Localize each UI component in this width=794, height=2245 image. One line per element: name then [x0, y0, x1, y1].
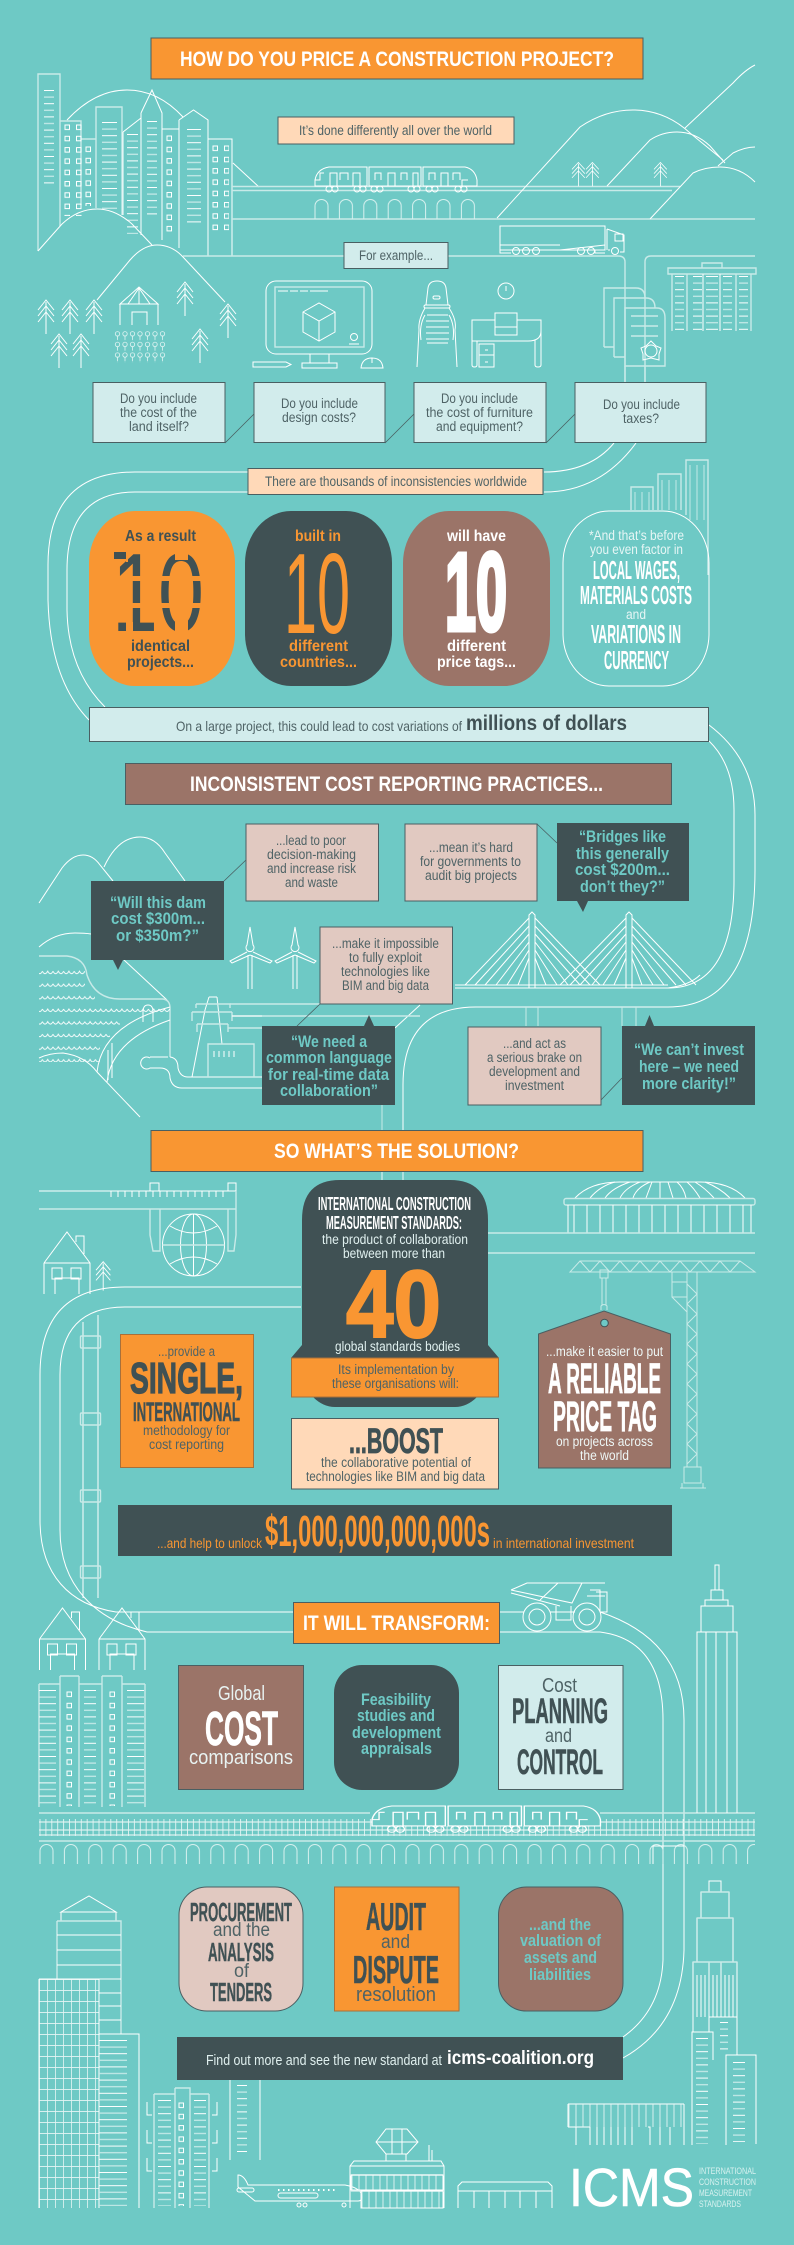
illustration: cable stayed bridge	[455, 912, 700, 1026]
callout: dam cost: “Will this dam	[110, 894, 206, 912]
effect: technologies: technologies like	[341, 964, 430, 979]
panel: audit and dispute: AUDIT	[366, 1896, 426, 1939]
callout: cannot invest	[622, 1015, 755, 1105]
callout: bridge cost: cost $200m...	[575, 861, 670, 879]
effect: poor decision making	[246, 824, 378, 901]
callout: bridge cost: this generally	[576, 845, 670, 863]
panel: cost planning and control: CONTROL	[517, 1743, 603, 1782]
illustration: right tower block	[668, 263, 756, 331]
millions of dollars bar: millions of dollars	[466, 712, 627, 735]
panel: global cost comparisons: comparisons	[189, 1747, 293, 1769]
question: land: land itself?	[129, 419, 189, 434]
panel: ICMS standards: these organisations will:	[332, 1376, 459, 1391]
question: design: design costs?	[282, 410, 356, 425]
panel: cost planning and control: Cost	[542, 1675, 577, 1697]
illustration: house and tree	[44, 1232, 110, 1294]
question: furniture	[414, 382, 546, 442]
panel: identical projects	[89, 511, 235, 686]
panel: reliable price tag: PRICE TAG	[553, 1393, 657, 1441]
illustration: land, trees and farm	[38, 282, 236, 368]
effect: poor decision making: and waste	[285, 875, 338, 890]
effect: poor decision making: ...lead to poor	[276, 833, 346, 848]
panel: ICMS standards: 40	[346, 1251, 441, 1358]
title	[151, 38, 643, 79]
panel: extra factors note: and	[626, 607, 646, 622]
effect: hard for governments: ...mean it’s hard	[429, 840, 513, 855]
panel: cost planning and control: PLANNING	[512, 1692, 608, 1731]
callout: dam cost	[91, 881, 224, 970]
question: design: Do you include	[281, 396, 358, 411]
panel: different countries	[245, 511, 392, 686]
panel: audit and dispute: and	[381, 1932, 410, 1953]
illustration: pylon and substation	[192, 997, 420, 1077]
panel: procurement and tenders: ANALYSIS	[208, 1937, 274, 1967]
panel: global cost comparisons: COST	[205, 1703, 278, 1756]
logo: ICMS: CONSTRUCTION	[699, 2177, 756, 2188]
illustration: right skyscrapers	[568, 1881, 756, 2145]
illustration: empire state style tower	[697, 1565, 737, 1813]
effect: serious brake: a serious brake on	[487, 1050, 582, 1065]
panel: valuation of assets: assets and	[524, 1949, 597, 1967]
panel: procurement and tenders: TENDERS	[210, 1977, 272, 2007]
panel: identical projects: projects...	[127, 654, 194, 671]
heading: inconsistent cost reporting: INCONSISTENT COST REPORTING PRACTICES...	[190, 773, 603, 796]
for example box: For example...	[359, 248, 433, 263]
callout: dam cost: cost $300m...	[111, 910, 205, 928]
question: taxes	[575, 382, 706, 442]
panel: valuation of assets: ...and the	[529, 1916, 591, 1934]
callout: bridge cost: “Bridges like	[579, 828, 666, 846]
panel: reliable price tag: ...make it easier to put	[546, 1344, 663, 1359]
callout: cannot invest: “We can’t invest	[634, 1041, 744, 1059]
panel: different countries: built in	[295, 528, 341, 545]
panel: extra factors note: LOCAL WAGES,	[593, 555, 680, 585]
illustration: tower crane and hook	[570, 1261, 755, 1488]
panel: audit and dispute: resolution	[356, 1984, 436, 2006]
illustration: railway with train and viaduct	[39, 1806, 755, 1864]
effect: serious brake: development and	[489, 1064, 580, 1079]
panel: boost	[292, 1418, 498, 1489]
panel: identical projects: As a result	[125, 528, 197, 545]
panel: global cost comparisons: Global	[218, 1683, 265, 1705]
millions of dollars bar: On a large project, this could lead to cost variations of	[176, 718, 462, 734]
panel: different countries: different	[289, 638, 349, 655]
callout: bridge cost	[557, 823, 689, 912]
effect: technologies: ...make it impossible	[332, 936, 439, 951]
effect: technologies	[320, 927, 452, 1004]
bar: trillion dollar investment: $1,000,000,000,000s	[265, 1507, 490, 1556]
illustration: airliner	[237, 2175, 362, 2207]
call to action bar	[177, 2037, 623, 2080]
question: land: Do you include	[120, 391, 197, 406]
callout: common language: for real-time data	[268, 1066, 390, 1084]
panel: global cost comparisons	[178, 1666, 304, 1790]
panel: single international methodology: INTERNATIONAL	[133, 1397, 240, 1427]
logo: ICMS: MEASUREMENT	[699, 2188, 752, 2199]
panel: feasibility studies	[334, 1665, 459, 1790]
panel: feasibility studies: development	[352, 1724, 441, 1742]
question: furniture: the cost of furniture	[426, 405, 533, 420]
panel: boost: the collaborative potential of	[321, 1455, 471, 1470]
illustration: wind turbines	[230, 927, 316, 989]
panel: identical projects: 10	[112, 531, 204, 655]
effect: hard for governments: for governments to	[420, 854, 521, 869]
road: curves from taxes box to section 2	[48, 443, 636, 720]
panel: audit and dispute: DISPUTE	[353, 1949, 439, 1992]
panel: single international methodology: ...provide a	[158, 1344, 215, 1359]
for example box	[344, 242, 448, 268]
heading: solution	[151, 1130, 643, 1172]
panel: ICMS standards: the product of collaboration	[322, 1232, 468, 1247]
callout: cannot invest: more clarity!”	[642, 1075, 736, 1093]
illustration: airport control tower and hangar	[350, 2129, 552, 2208]
illustration: dome stadium	[488, 1182, 755, 1253]
effect: hard for governments: audit big projects	[425, 868, 517, 883]
callout: bridge cost: don’t they?”	[580, 878, 665, 896]
effect: serious brake: ...and act as	[503, 1036, 566, 1051]
call to action bar: icms-coalition.org	[447, 2047, 594, 2069]
panel: different price tags: 10	[445, 531, 507, 654]
illustration: viaduct, train and road	[183, 163, 755, 382]
illustration: city skyline	[38, 74, 232, 302]
panel: ICMS standards: between more than	[343, 1246, 445, 1261]
panel: different price tags: will have	[446, 528, 506, 545]
panel: identical projects: identical	[131, 638, 190, 655]
effect: poor decision making: and increase risk	[267, 861, 356, 876]
panel: single international methodology: cost reporting	[149, 1437, 224, 1452]
panel: ICMS standards	[291, 1180, 499, 1407]
panel: cost planning and control: and	[545, 1726, 572, 1747]
panel: valuation of assets: valuation of	[520, 1932, 601, 1950]
question: furniture: Do you include	[441, 391, 518, 406]
effect: technologies: BIM and big data	[342, 978, 429, 993]
question: furniture: and equipment?	[436, 419, 523, 434]
illustration: dump truck	[511, 1583, 607, 1631]
panel: extra factors note: CURRENCY	[604, 645, 669, 675]
panel: procurement and tenders: PROCUREMENT	[190, 1897, 292, 1927]
logo: ICMS: ICMS	[569, 2158, 694, 2218]
panel: extra factors note: you even factor in	[590, 542, 683, 557]
effect: technologies: to fully exploit	[349, 950, 422, 965]
question: design	[254, 382, 385, 442]
illustration: lorry	[500, 226, 624, 254]
road: continuing from long bar around right edge	[382, 725, 755, 1130]
callouts and effects	[224, 824, 622, 1105]
question: taxes: Do you include	[603, 397, 680, 412]
illustration: dam, hills and reservoir	[39, 837, 262, 1117]
panel: cost planning and control	[498, 1666, 623, 1790]
panel: procurement and tenders	[179, 1887, 303, 2011]
panel: extra factors note	[563, 511, 709, 686]
panel: extra factors note: VARIATIONS IN	[591, 619, 681, 649]
bar: trillion dollar investment	[118, 1505, 672, 1556]
panel: extra factors note: *And that’s before	[589, 528, 684, 543]
callout: common language: common language	[266, 1049, 392, 1067]
illustration: apartment blocks	[39, 1676, 145, 1807]
callout: common language: “We need a	[291, 1033, 368, 1051]
millions of dollars bar	[90, 708, 708, 742]
panel: single international methodology	[120, 1334, 254, 1468]
call to action bar: Find out more and see the new standard at	[206, 2053, 442, 2069]
subtitle box: It’s done differently all over the world	[299, 123, 492, 138]
illustration: caliper and globe	[39, 1183, 236, 1276]
question: land: the cost of the	[120, 405, 197, 420]
illustration: terraced houses	[40, 1608, 145, 1670]
bar: trillion dollar investment: in international investment	[493, 1535, 634, 1551]
subtitle box	[278, 117, 514, 144]
panel: feasibility studies: Feasibility	[361, 1691, 432, 1709]
road and pipeline left	[40, 1287, 301, 1632]
panel: feasibility studies: appraisals	[361, 1740, 432, 1758]
callout: dam cost: or $350m?”	[116, 927, 199, 945]
panel: ICMS standards: global standards bodies	[335, 1339, 460, 1354]
panel: boost: technologies like BIM and big data	[306, 1469, 485, 1484]
effect: poor decision making: decision-making	[267, 847, 356, 862]
illustration: mid apartment block	[147, 2080, 260, 2208]
panel: procurement and tenders: of	[234, 1961, 250, 1982]
panel: valuation of assets: liabilities	[529, 1966, 591, 1984]
panel: reliable price tag	[538, 1311, 670, 1468]
illustration: stacked chairs, desk and clock	[417, 281, 541, 367]
heading: it will transform	[294, 1602, 500, 1644]
illustration: small towers behind note	[631, 460, 708, 575]
road right side	[500, 1612, 684, 2058]
panel: valuation of assets	[498, 1887, 623, 2011]
heading: inconsistent cost reporting	[126, 764, 672, 804]
effect: serious brake	[468, 1027, 601, 1105]
callout: cannot invest: here – we need	[639, 1058, 739, 1076]
panel: single international methodology: methodology for	[143, 1423, 230, 1438]
callout: common language: collaboration”	[280, 1082, 378, 1100]
question: taxes: taxes?	[623, 411, 659, 426]
callout: common language	[262, 1015, 395, 1105]
panel: different countries: countries...	[280, 654, 357, 671]
panel: ICMS standards: MEASUREMENT STANDARDS:	[326, 1213, 462, 1233]
illustration: right hills and trees	[497, 65, 755, 219]
panel: ICMS standards: Its implementation by	[338, 1362, 454, 1377]
logo: ICMS: STANDARDS	[699, 2199, 741, 2210]
panel: different price tags	[403, 511, 550, 686]
illustration: paperwork with seal	[604, 288, 665, 382]
panel: procurement and tenders: and the	[213, 1920, 270, 1941]
panel: audit and dispute	[334, 1887, 459, 2011]
illustration: computer with 3D cube	[253, 281, 383, 368]
question boxes	[93, 382, 706, 443]
panel: reliable price tag: on projects across	[556, 1434, 653, 1449]
question: land	[93, 382, 225, 442]
panel: feasibility studies: studies and	[357, 1707, 435, 1725]
panel: different price tags: price tags...	[437, 654, 516, 671]
title: HOW DO YOU PRICE A CONSTRUCTION PROJECT?	[180, 48, 614, 71]
bar: trillion dollar investment: ...and help to unlock	[157, 1535, 263, 1551]
effect: hard for governments	[405, 824, 537, 901]
panel: reliable price tag: the world	[580, 1448, 629, 1463]
panel: ICMS standards: INTERNATIONAL CONSTRUCTION	[318, 1194, 471, 1214]
inconsistencies box: There are thousands of inconsistencies worldwide	[265, 474, 527, 489]
panel: different price tags: different	[447, 638, 507, 655]
heading: solution: SO WHAT’S THE SOLUTION?	[274, 1140, 519, 1163]
panel: different countries: 10	[284, 531, 350, 658]
heading: it will transform: IT WILL TRANSFORM:	[303, 1612, 490, 1635]
inconsistencies box	[248, 468, 543, 494]
effect: serious brake: investment	[505, 1078, 564, 1093]
illustration: left skyscraper cluster	[39, 1896, 139, 2208]
logo: ICMS: INTERNATIONAL	[699, 2166, 756, 2177]
panel: boost: ...BOOST	[349, 1422, 443, 1461]
panel: single international methodology: SINGLE,	[130, 1354, 243, 1403]
